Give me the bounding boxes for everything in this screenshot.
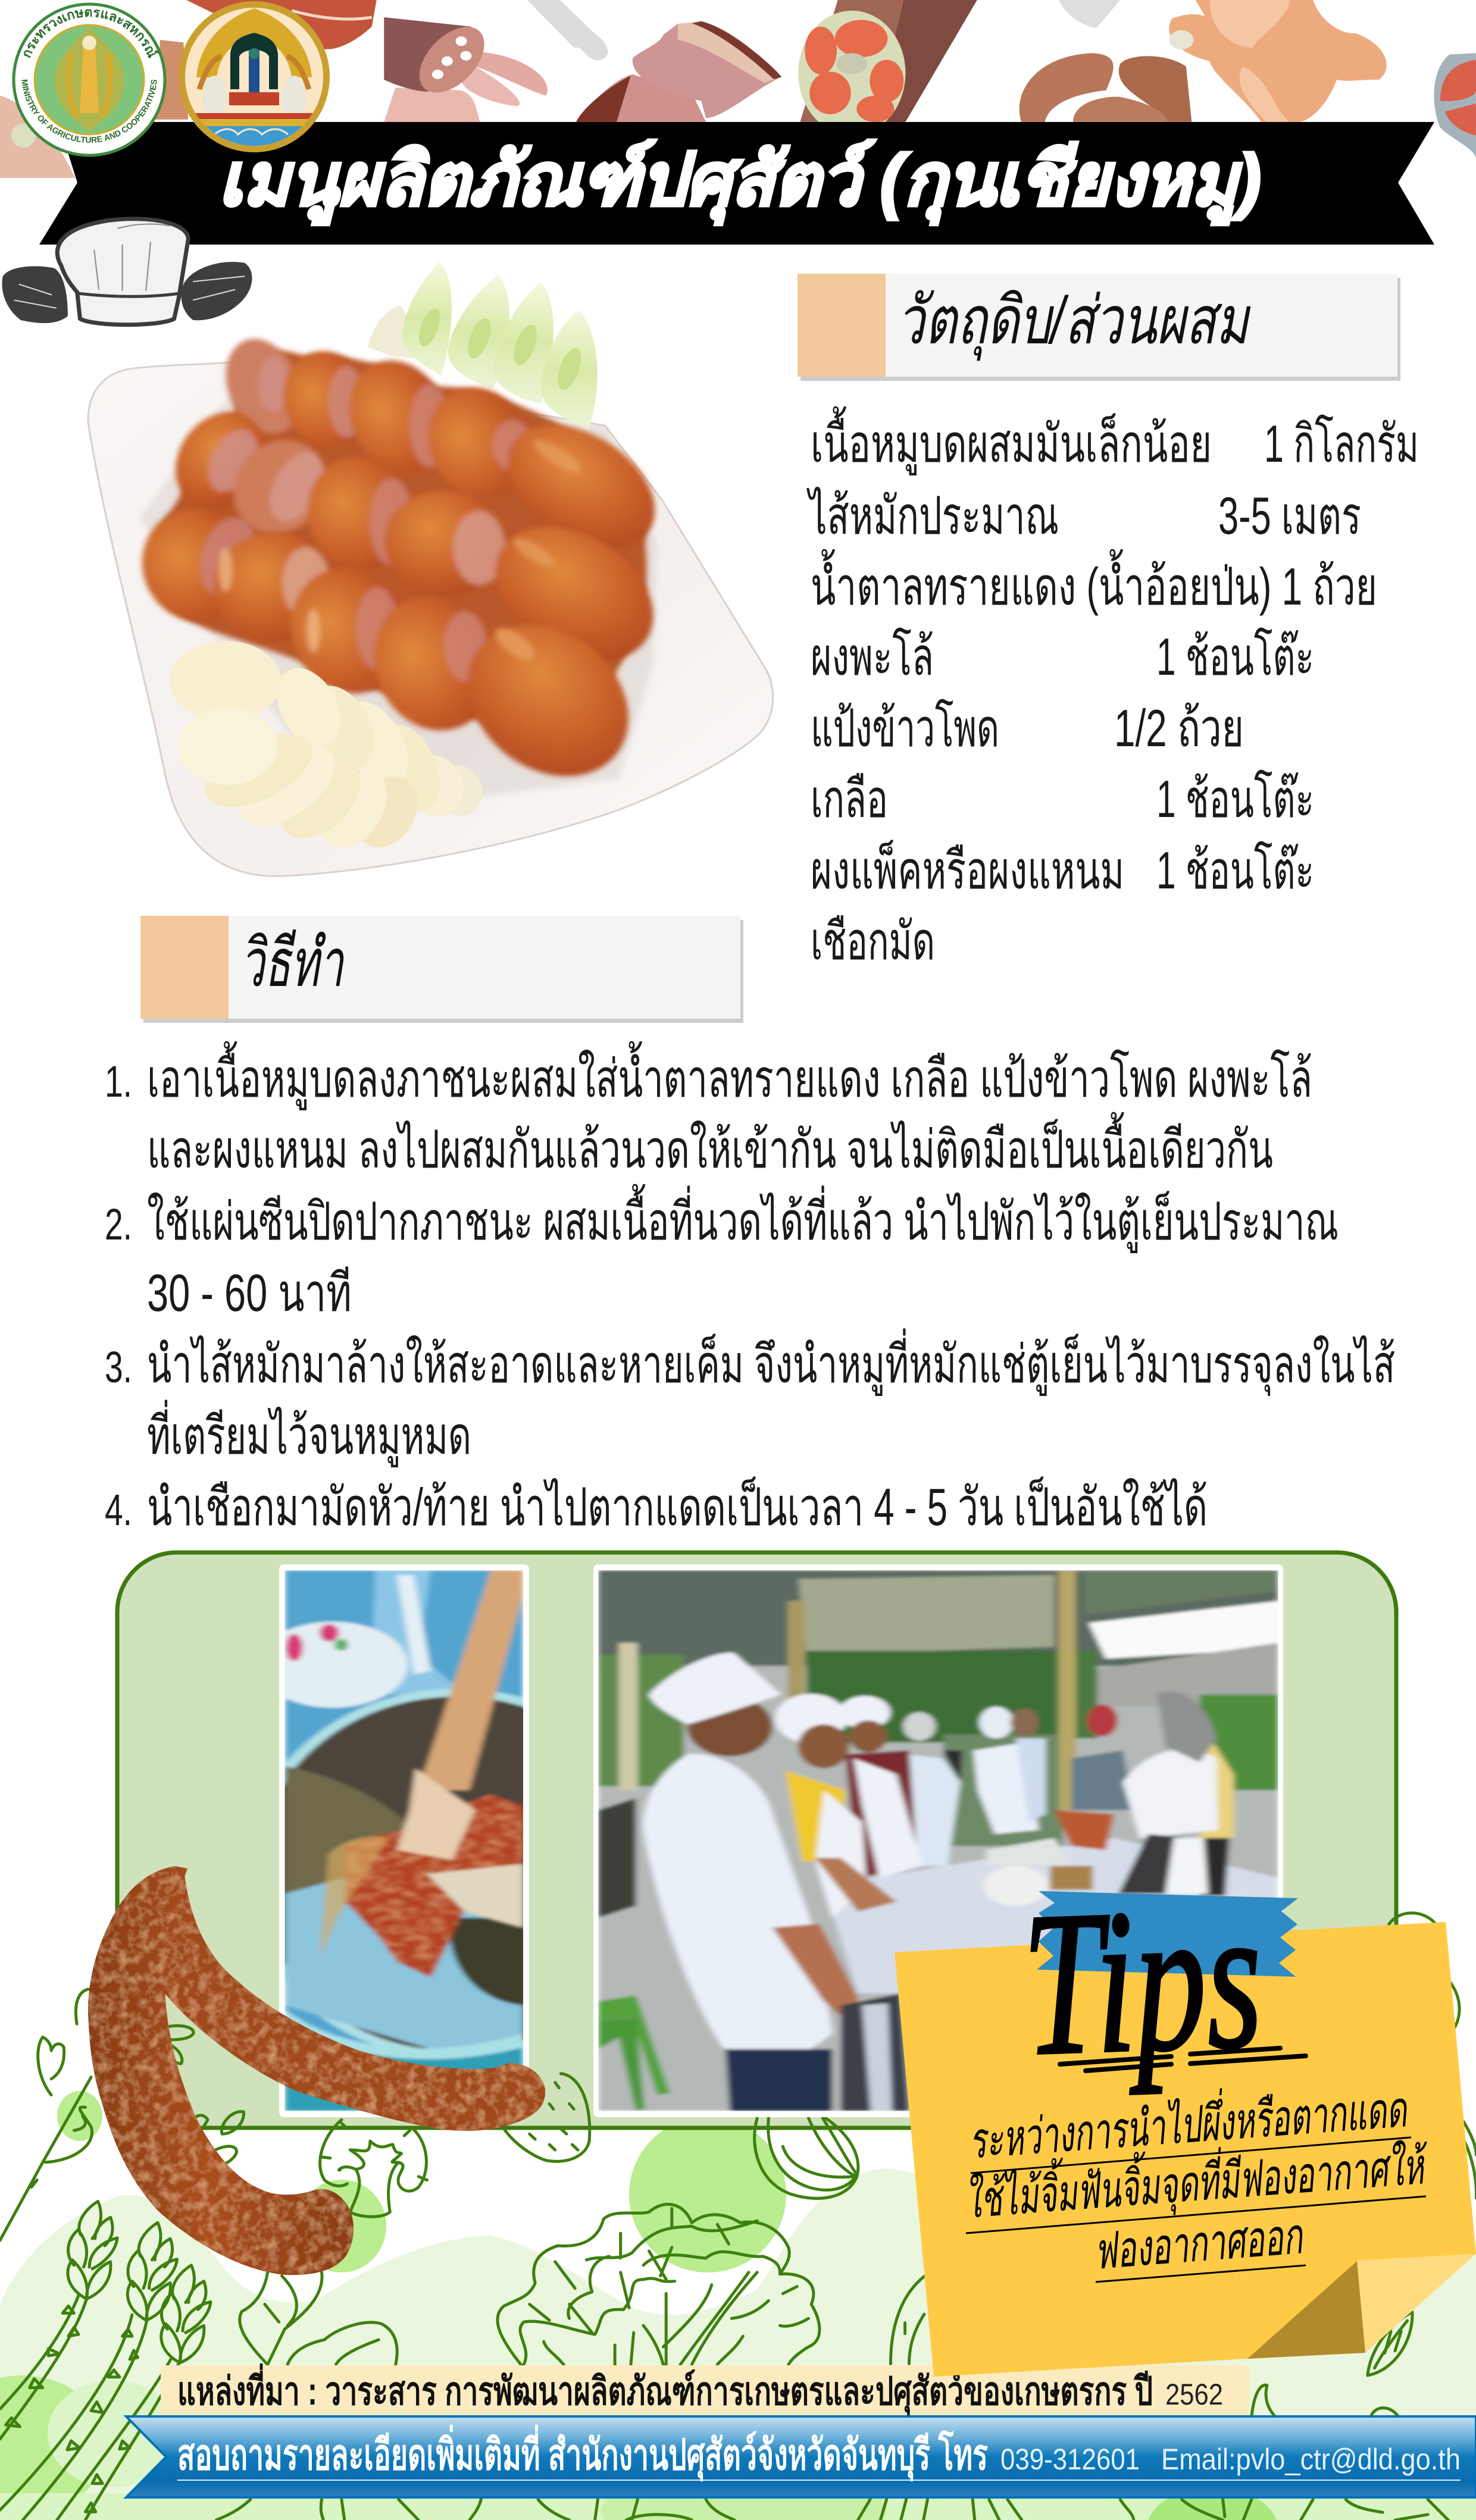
banner ribbon [39, 122, 1434, 245]
background: light green hills [0, 2091, 1476, 2520]
ingredients list: เชือกมัด [811, 912, 935, 971]
method steps: 4. [105, 1485, 132, 1535]
photo: hanging sausages [88, 1866, 545, 2275]
method steps: 3. [105, 1342, 132, 1392]
title text: เมนูผลิตภัณฑ์ปศุสัตว์ (กุนเชียงหมู) [218, 139, 1261, 225]
sausage slices, top row [213, 330, 680, 574]
sausage base mass [152, 351, 647, 731]
background cooks [839, 1696, 1136, 1878]
chicken leg [1169, 0, 1387, 122]
sausage cluster [384, 17, 548, 122]
ingredients list [806, 406, 1419, 971]
woman in headscarf [1118, 1692, 1234, 1896]
sausage slices, middle row [159, 399, 681, 688]
ingredients list: แป้งข้าวโพด [811, 699, 999, 757]
ingredients list: เกลือ [811, 769, 888, 828]
logo: ministry of agriculture: กระทรวงเกษตรและสหกรณ์ [24, 9, 160, 58]
background: meat illustration strip [0, 0, 1476, 178]
source credit strip [161, 2363, 1249, 2416]
leek slices [368, 262, 598, 430]
ingredients list: 1 ช้อนโต๊ะ [1156, 627, 1314, 686]
ingredients list: ไส้หมักประมาณ [806, 486, 1059, 545]
back sausage [160, 1874, 545, 2131]
ham slab [576, 21, 781, 122]
asparagus stems [0, 2296, 180, 2520]
table items [983, 1810, 1114, 1906]
vegetable line doodles, left and centre [0, 1989, 858, 2520]
ingredients list: ผงแพ็คหรือผงแหนม [811, 840, 1124, 900]
method steps [105, 1041, 1395, 1536]
ingredients list: 1 ช้อนโต๊ะ [1156, 769, 1314, 828]
ingredients list: เนื้อหมูบดผสมมันเล็กน้อย [811, 406, 1212, 475]
heading: ingredients: วัตถุดิบ/ส่วนผสม [897, 283, 1251, 361]
tip text [962, 2074, 1431, 2280]
yellow shirt cook [775, 1694, 896, 1918]
method steps: 2. [105, 1200, 132, 1249]
ingredients list: 1 ช้อนโต๊ะ [1156, 841, 1314, 900]
blue tape [1037, 1891, 1298, 1977]
sausage slices, bottom row [131, 435, 661, 806]
note fold [1357, 2254, 1476, 2353]
strawberry doodle [504, 2074, 590, 2161]
method steps: ที่เตรียมไว้จนหมูหมด [147, 1400, 471, 1467]
front cook [643, 1652, 858, 2111]
photo: cooking class group [593, 1564, 1283, 2117]
plate [88, 362, 773, 876]
photo: sausage plate [88, 262, 773, 876]
method steps: 1. [105, 1057, 132, 1106]
sausages [1020, 53, 1192, 122]
leaf sprig doodle [0, 2037, 92, 2240]
vegetable line doodles, right side [858, 1913, 1476, 2520]
tips sticky note [895, 1862, 1476, 2377]
front sausage [88, 1866, 354, 2275]
contact ribbon [126, 2416, 1476, 2497]
right meat piece [1434, 53, 1476, 159]
ingredients list: ผงพะโล้ [811, 627, 934, 686]
lower doodles under ribbon [217, 2499, 734, 2520]
source credit strip: 2562 [1165, 2378, 1223, 2411]
lettuce doodle [498, 2204, 820, 2365]
spinach doodle [240, 2272, 397, 2365]
asparagus heads [68, 2202, 211, 2363]
heading: method [140, 916, 743, 1023]
contact ribbon: สอบถามรายละเอียดเพิ่มเติมที่ สำนักงานปศุสัตว์จังหวัดจันทบุรี โทร [177, 2424, 988, 2482]
tip text: ฟองอากาศออก [1092, 2208, 1306, 2280]
tips word: Tips [1020, 1862, 1265, 2099]
method steps: 30 - 60 นาที [147, 1263, 352, 1322]
green panel [117, 1552, 1396, 2128]
heading: ingredients [798, 274, 1400, 381]
photo: mixing meat in a bowl [243, 1564, 670, 2117]
contact ribbon: 039-312601 [1000, 2443, 1140, 2476]
logo: ministry of agriculture [12, 2, 167, 157]
icon: chef hat and steaks [2, 219, 252, 325]
white garnish slices [170, 641, 490, 859]
whisk doodle [755, 2118, 858, 2198]
tips underlines [1060, 2048, 1306, 2071]
ham cross-section [798, 0, 977, 136]
heading: method: วิธีทำ [240, 926, 345, 1000]
ingredients list: 3-5 เมตร [1218, 486, 1361, 545]
logo: ministry of agriculture: MINISTRY OF AGRICULTURE AND COOPERATIVES [21, 80, 157, 143]
ingredients list: 1/2 ถ้วย [1114, 699, 1244, 757]
mushroom doodle [320, 2120, 427, 2217]
logo: department of livestock [179, 1, 330, 152]
